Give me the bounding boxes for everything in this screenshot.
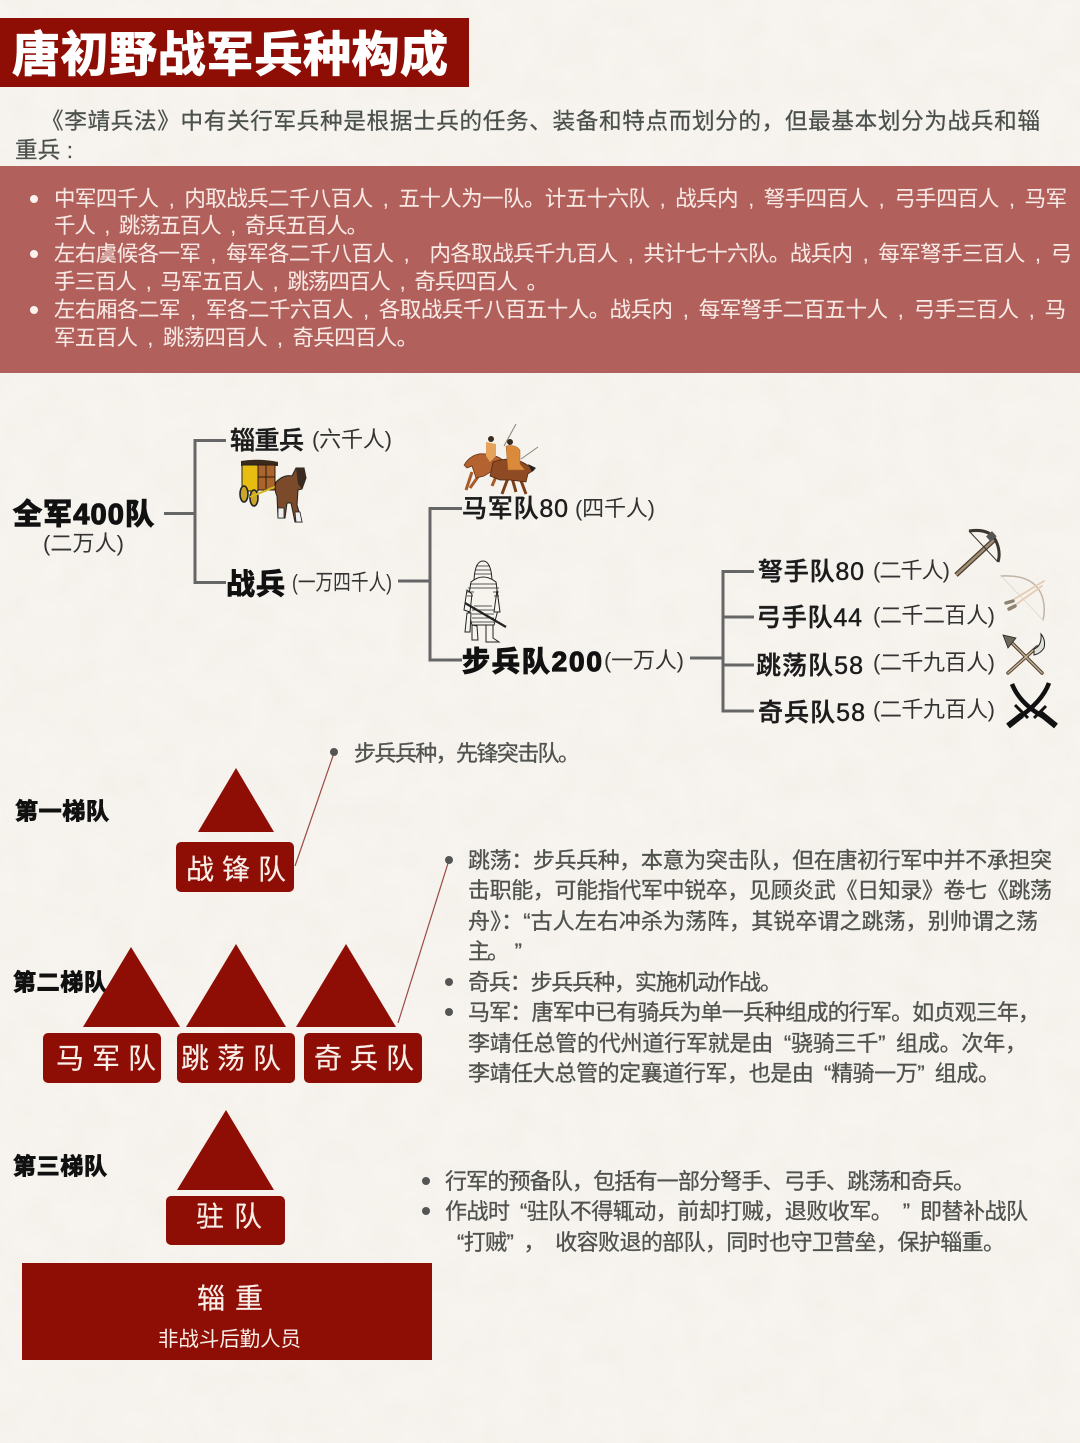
second echelon unit: shock troops [177, 944, 295, 1083]
second echelon unit: surprise troops [296, 944, 422, 1083]
panel: troop allocation list: 左右虞候各一军 , 每军各二千八百人 , 内各取战兵千九百人 , 共计七十六队。战兵内 , 每军弩手三百人 , 弓 [54, 242, 1072, 266]
intro paragraph: 《李靖兵法》中有关行军兵种是根据士兵的任务、装备和特点而划分的，但最基本划分为战兵和辎 [41, 109, 1040, 134]
callout: vanguard note: 步兵兵种，先锋突击队。 [354, 741, 580, 766]
base block: baggage train: 辎重 [197, 1283, 263, 1314]
panel: troop allocation list: 左右厢各二军 , 军各二千六百人 , 各取战兵千八百五十人。战兵内 , 每军弩手二百五十人 , 弓手三百人 , 马 [54, 298, 1066, 322]
node: baggage troops: (六千人) [312, 427, 392, 452]
callout: second echelon notes: 跳荡：步兵兵种，本意为突击队，但在唐初行军中并不承担突 [468, 848, 1052, 873]
icon: crossed spear and sword [1003, 634, 1045, 673]
callout: third echelon notes: 行军的预备队，包括有一部分弩手、弓手、跳荡和奇兵。 [445, 1169, 975, 1194]
node: crossbowmen: (二千人) [873, 558, 950, 583]
callout: second echelon notes: 李靖任大总管的定襄道行军，也是由 “精骑一万” 组成。 [468, 1061, 1000, 1086]
second echelon unit: surprise troops: 奇兵队 [314, 1043, 414, 1074]
callout: third echelon notes [422, 1169, 1028, 1255]
icon: armored infantry soldier [464, 561, 506, 642]
node: cavalry: 马军队80 [462, 495, 568, 523]
node: baggage troops: 辎重兵 [230, 427, 304, 455]
callout: second echelon notes: 舟》：“古人左右冲杀为荡阵，其锐卒谓之跳荡，别帅谓之荡 [468, 909, 1038, 934]
callout: second echelon notes: 马军：唐军中已有骑兵为单一兵种组成的行军。如贞观三年， [468, 1000, 1040, 1025]
node: crossbowmen [758, 558, 950, 586]
base block: baggage train: 非战斗后勤人员 [158, 1328, 301, 1351]
node: infantry: 步兵队200 [462, 646, 602, 677]
intro paragraph [15, 109, 1040, 163]
base block: baggage train [22, 1263, 432, 1360]
node: infantry: (一万人) [604, 648, 684, 673]
node: combat troops: (一万四千人) [292, 570, 392, 595]
panel: troop allocation list: 千人 , 跳荡五百人 , 奇兵五百人。 [54, 214, 368, 238]
callout: vanguard note [295, 741, 580, 866]
node: shock troops [756, 650, 995, 680]
title banner: 唐初野战军兵种构成 [12, 29, 448, 82]
node: cavalry [462, 495, 655, 523]
node: surprise troops: (二千九百人) [873, 697, 995, 722]
icon: horse-drawn baggage cart [240, 460, 306, 522]
root node: whole army [13, 498, 154, 556]
node: archers [756, 603, 995, 632]
icon: crossed black sabres [1008, 683, 1056, 726]
callout: second echelon notes: 李靖任总管的代州道行军就是由 “骁骑三千” 组成。次年， [468, 1031, 1027, 1056]
node: combat troops: 战兵 [226, 568, 285, 601]
heading: third echelon: 第三梯队 [13, 1153, 107, 1179]
node: baggage troops [230, 427, 392, 455]
node: shock troops: (二千九百人) [873, 650, 995, 675]
icon: bow and arrows [1001, 576, 1044, 620]
tree connector lines [164, 440, 754, 711]
callout: second echelon notes: 击职能，可能指代军中锐卒，见顾炎武《日知录》卷七《跳荡 [468, 878, 1052, 903]
third echelon unit: garrison [166, 1110, 285, 1245]
panel: troop allocation list [0, 166, 1080, 373]
second echelon unit: cavalry [43, 947, 180, 1083]
root node: whole army: (二万人) [43, 531, 124, 556]
node: archers: (二千二百人) [873, 603, 995, 628]
first echelon unit: vanguard: 战锋队 [186, 854, 286, 885]
panel: troop allocation list: 手三百人 , 马军五百人 , 跳荡四百人 , 奇兵四百人 。 [54, 270, 548, 294]
node: surprise troops: 奇兵队58 [758, 699, 865, 727]
node: crossbowmen: 弩手队80 [758, 558, 864, 586]
second echelon unit: cavalry: 马军队 [56, 1043, 156, 1074]
icon: mounted cavalry [464, 424, 538, 494]
heading: second echelon: 第二梯队 [13, 969, 107, 995]
panel: troop allocation list: 军五百人 , 跳荡四百人 , 奇兵四百人。 [54, 326, 418, 350]
second echelon unit: shock troops: 跳荡队 [181, 1043, 281, 1074]
node: infantry [462, 646, 684, 677]
node: surprise troops [758, 697, 995, 727]
node: cavalry: (四千人) [575, 496, 655, 521]
callout: second echelon notes: 主。 ” [468, 939, 522, 964]
heading: first echelon: 第一梯队 [15, 798, 109, 824]
callout: second echelon notes: 奇兵：步兵兵种，实施机动作战。 [468, 970, 782, 995]
callout: third echelon notes: 作战时 “驻队不得辄动，前却打贼，退败收军。 ” 即替补战队 [445, 1199, 1028, 1224]
node: combat troops [226, 568, 392, 601]
node: archers: 弓手队44 [756, 604, 862, 632]
panel: troop allocation list: 中军四千人 , 内取战兵二千八百人 , 五十人为一队。计五十六队 , 战兵内 , 弩手四百人 , 弓手四百人 , 马军 [54, 187, 1067, 211]
node: shock troops: 跳荡队58 [756, 652, 863, 680]
root node: whole army: 全军400队 [13, 498, 154, 531]
callout: third echelon notes: “打贼” ， 收容败退的部队，同时也守卫营垒，保护辎重。 [457, 1230, 1005, 1255]
intro paragraph: 重兵 : [15, 138, 73, 163]
third echelon unit: garrison: 驻队 [196, 1201, 262, 1232]
callout: second echelon notes [398, 848, 1052, 1086]
first echelon unit: vanguard [176, 768, 294, 892]
icon: crossbow [956, 530, 999, 575]
